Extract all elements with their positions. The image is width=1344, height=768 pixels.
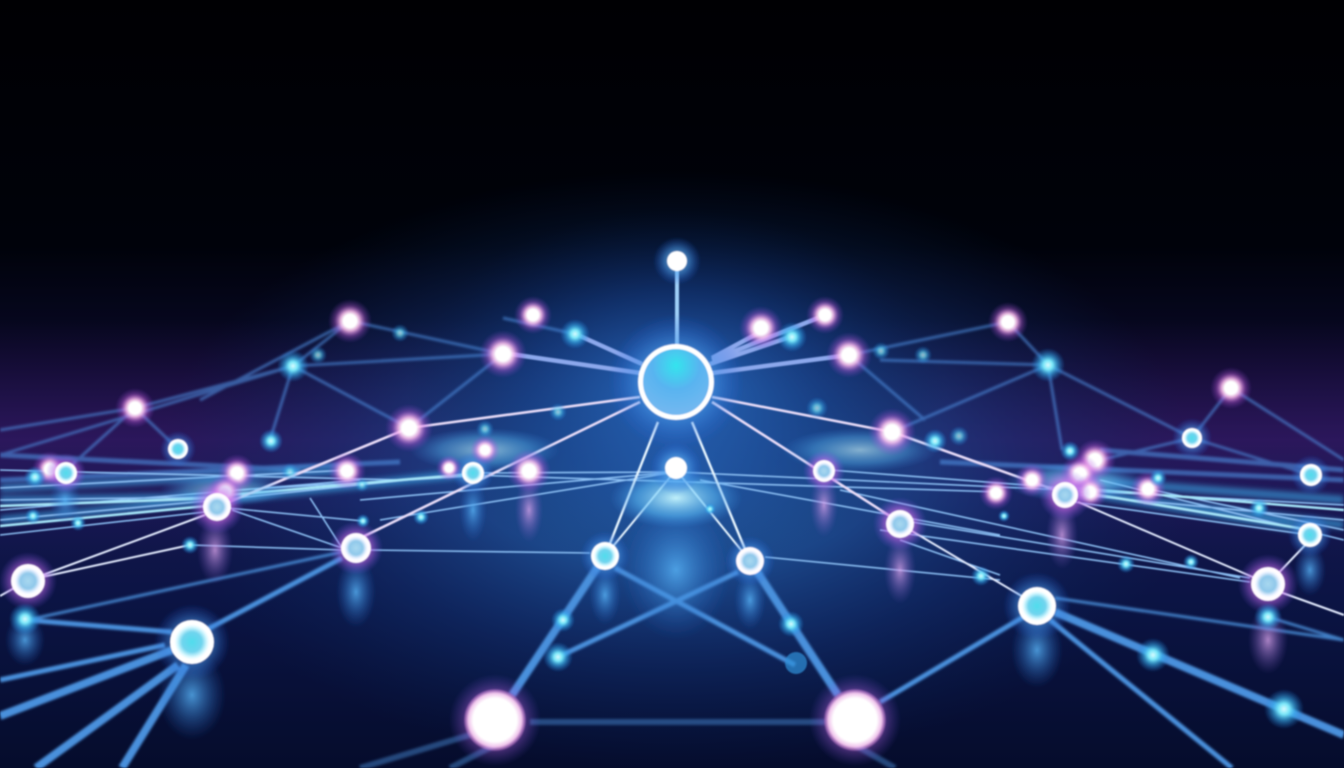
ringed nodes: [0, 418, 1332, 680]
thin floor and mid web lines: [0, 470, 1344, 582]
scene: [0, 237, 1344, 768]
floor light pools: [160, 428, 1145, 528]
pink glowing nodes: [32, 296, 1252, 766]
band glow: [0, 470, 1344, 530]
blue glowing nodes: [9, 237, 1304, 729]
far web connections: [0, 318, 1344, 480]
thick floor connections: [0, 552, 1344, 768]
floor reflections: [5, 473, 1326, 740]
central hub: [608, 314, 744, 450]
bright floor lines: [0, 474, 1344, 615]
hub spokes: [224, 270, 1055, 561]
